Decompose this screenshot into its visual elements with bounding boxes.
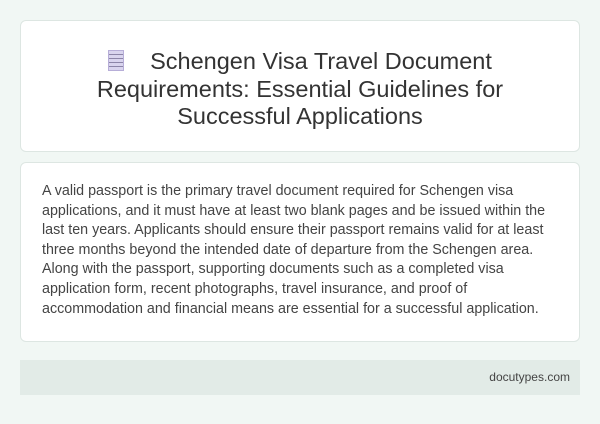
panel: title card [20,20,580,152]
title: Schengen Visa Travel Document Requirements: Essential Guidelines for Successful Applications [97,48,503,129]
footer [20,360,580,395]
footer text: docutypes.com [489,370,570,384]
icon: document [108,50,124,71]
text block: A valid passport is the primary travel document required for Schengen visa applications, and it must have at least two blank pages and be issued within the last ten years. Applicants should ensure their passport remains valid for at least three months beyond the intended date of departure from the Schengen area. Along with the passport, supporting documents such as a completed visa application form, recent photographs, travel insurance, and proof of accommodation and financial means are essential for a successful application. [42,183,545,317]
panel: body text [20,162,580,342]
